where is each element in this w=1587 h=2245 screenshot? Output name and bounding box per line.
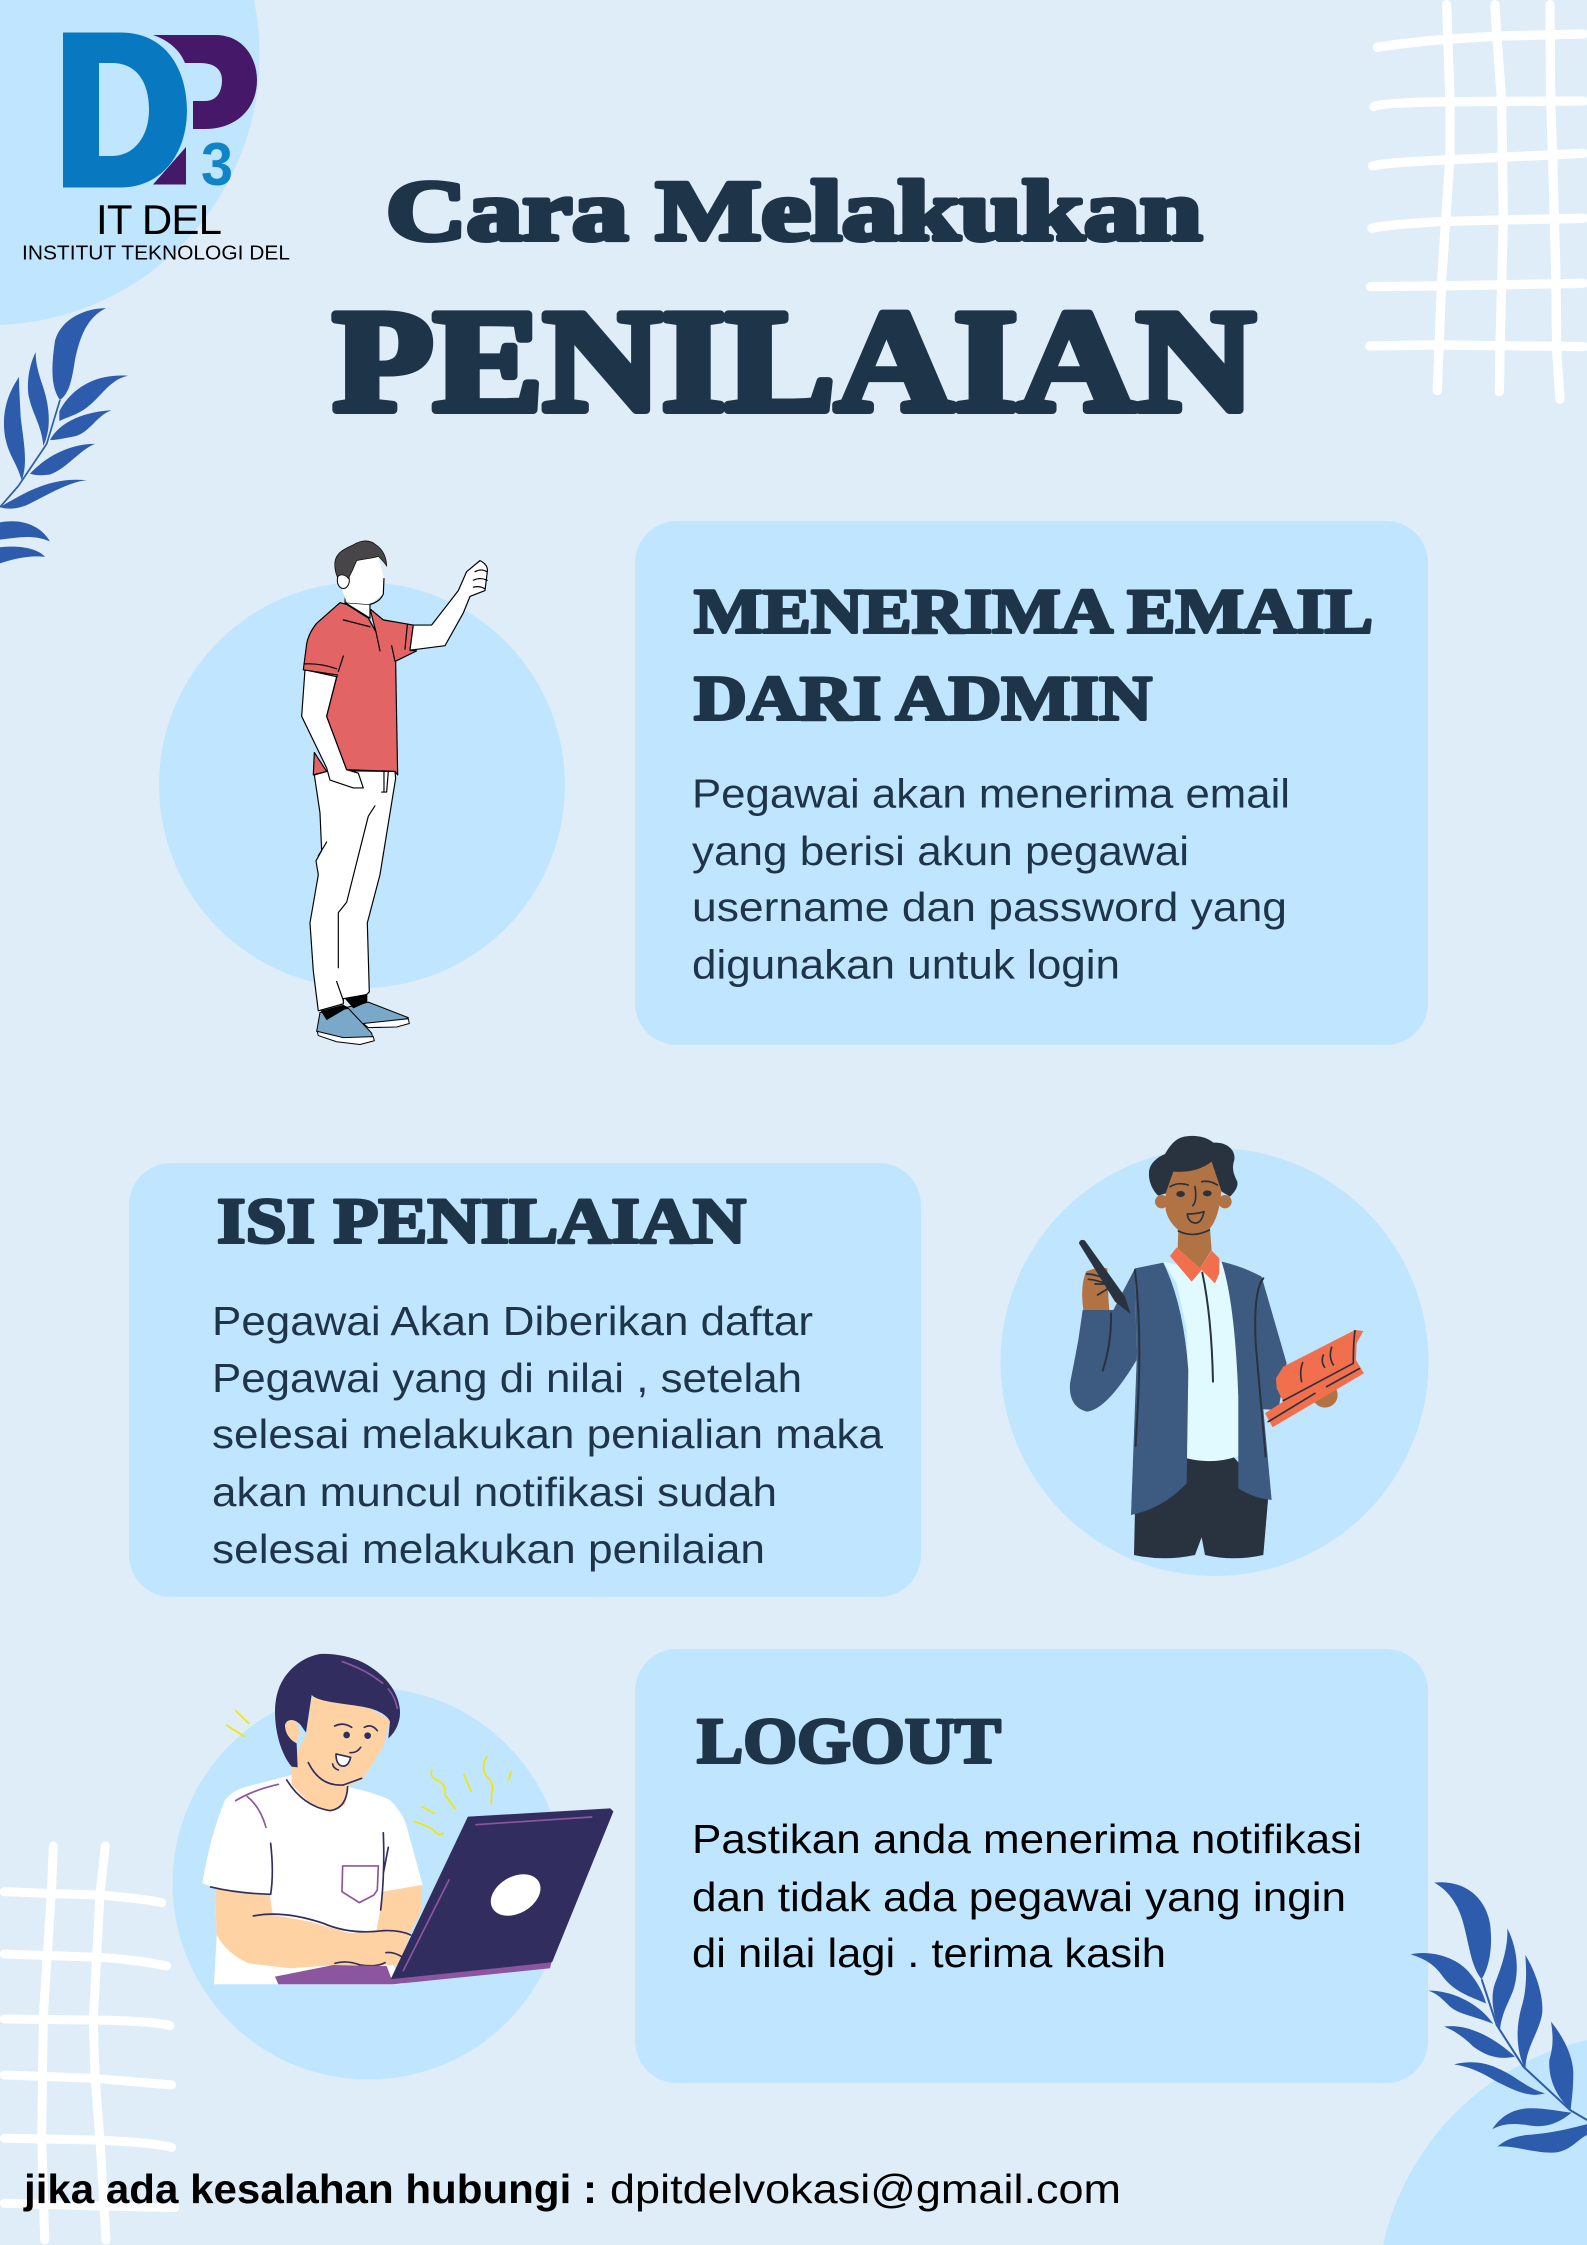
illustration: man with laptop xyxy=(202,1654,613,1984)
body text: selesai melakukan penilaian xyxy=(212,1526,765,1572)
body text: yang berisi akun pegawai xyxy=(692,828,1189,874)
illustration: standing man in red shirt xyxy=(302,541,487,1045)
leaf branch: top left xyxy=(0,308,128,563)
body text: di nilai lagi . terima kasih xyxy=(692,1930,1166,1976)
title: Cara Melakukan: Cara Melakukan xyxy=(386,162,1202,258)
logo: DP3 IT DEL: INSTITUT TEKNOLOGI DEL xyxy=(22,242,290,264)
footer contact line xyxy=(23,2166,1121,2212)
decorative circle: bottom right xyxy=(1383,2040,1587,2245)
circle behind person 1 xyxy=(159,582,565,988)
decorative grid: top right xyxy=(1370,5,1583,399)
panel: isi penilaian xyxy=(129,1163,921,1597)
circle behind person 3 xyxy=(172,1688,564,2080)
panel: logout xyxy=(635,1649,1428,2083)
heading line 2: DARI ADMIN xyxy=(694,664,1152,734)
circle behind person 2 xyxy=(1000,1148,1428,1576)
body text: Pastikan anda menerima notifikasi xyxy=(692,1816,1362,1862)
leaf branch: bottom right xyxy=(1411,1882,1587,2153)
body text: selesai melakukan penialian maka xyxy=(212,1411,883,1457)
heading: menerima email dari admin: MENERIMA EMAIL xyxy=(694,576,1373,646)
body text: username dan password yang xyxy=(692,884,1287,930)
illustration: teacher with pen and book xyxy=(1070,1136,1364,1558)
body text xyxy=(692,1816,1362,1976)
body text xyxy=(212,1298,883,1572)
body text: akan muncul notifikasi sudah xyxy=(212,1469,777,1515)
body text: Pegawai akan menerima email xyxy=(692,770,1290,816)
decorative circle: top left xyxy=(0,0,260,325)
body text: digunakan untuk login xyxy=(692,942,1120,988)
logo: DP3 IT DEL: IT DEL xyxy=(96,196,222,243)
body text: Pegawai yang di nilai , setelah xyxy=(212,1355,802,1401)
logo: DP3 IT DEL: 3 xyxy=(201,131,233,198)
footer contact line: jika ada kesalahan hubungi : xyxy=(23,2166,597,2212)
decorative grid: bottom left xyxy=(4,1846,175,2240)
body text xyxy=(692,770,1290,988)
heading: logout: LOGOUT xyxy=(697,1706,1001,1778)
heading: isi penilaian: ISI PENILAIAN xyxy=(217,1186,746,1258)
body text: dan tidak ada pegawai yang ingin xyxy=(692,1874,1346,1920)
footer contact line: dpitdelvokasi@gmail.com xyxy=(610,2166,1121,2212)
title: PENILAIAN: PENILAIAN xyxy=(333,280,1255,442)
panel: menerima email xyxy=(635,521,1428,1045)
logo: DP3 IT DEL xyxy=(22,32,290,264)
body text: Pegawai Akan Diberikan daftar xyxy=(212,1298,813,1344)
